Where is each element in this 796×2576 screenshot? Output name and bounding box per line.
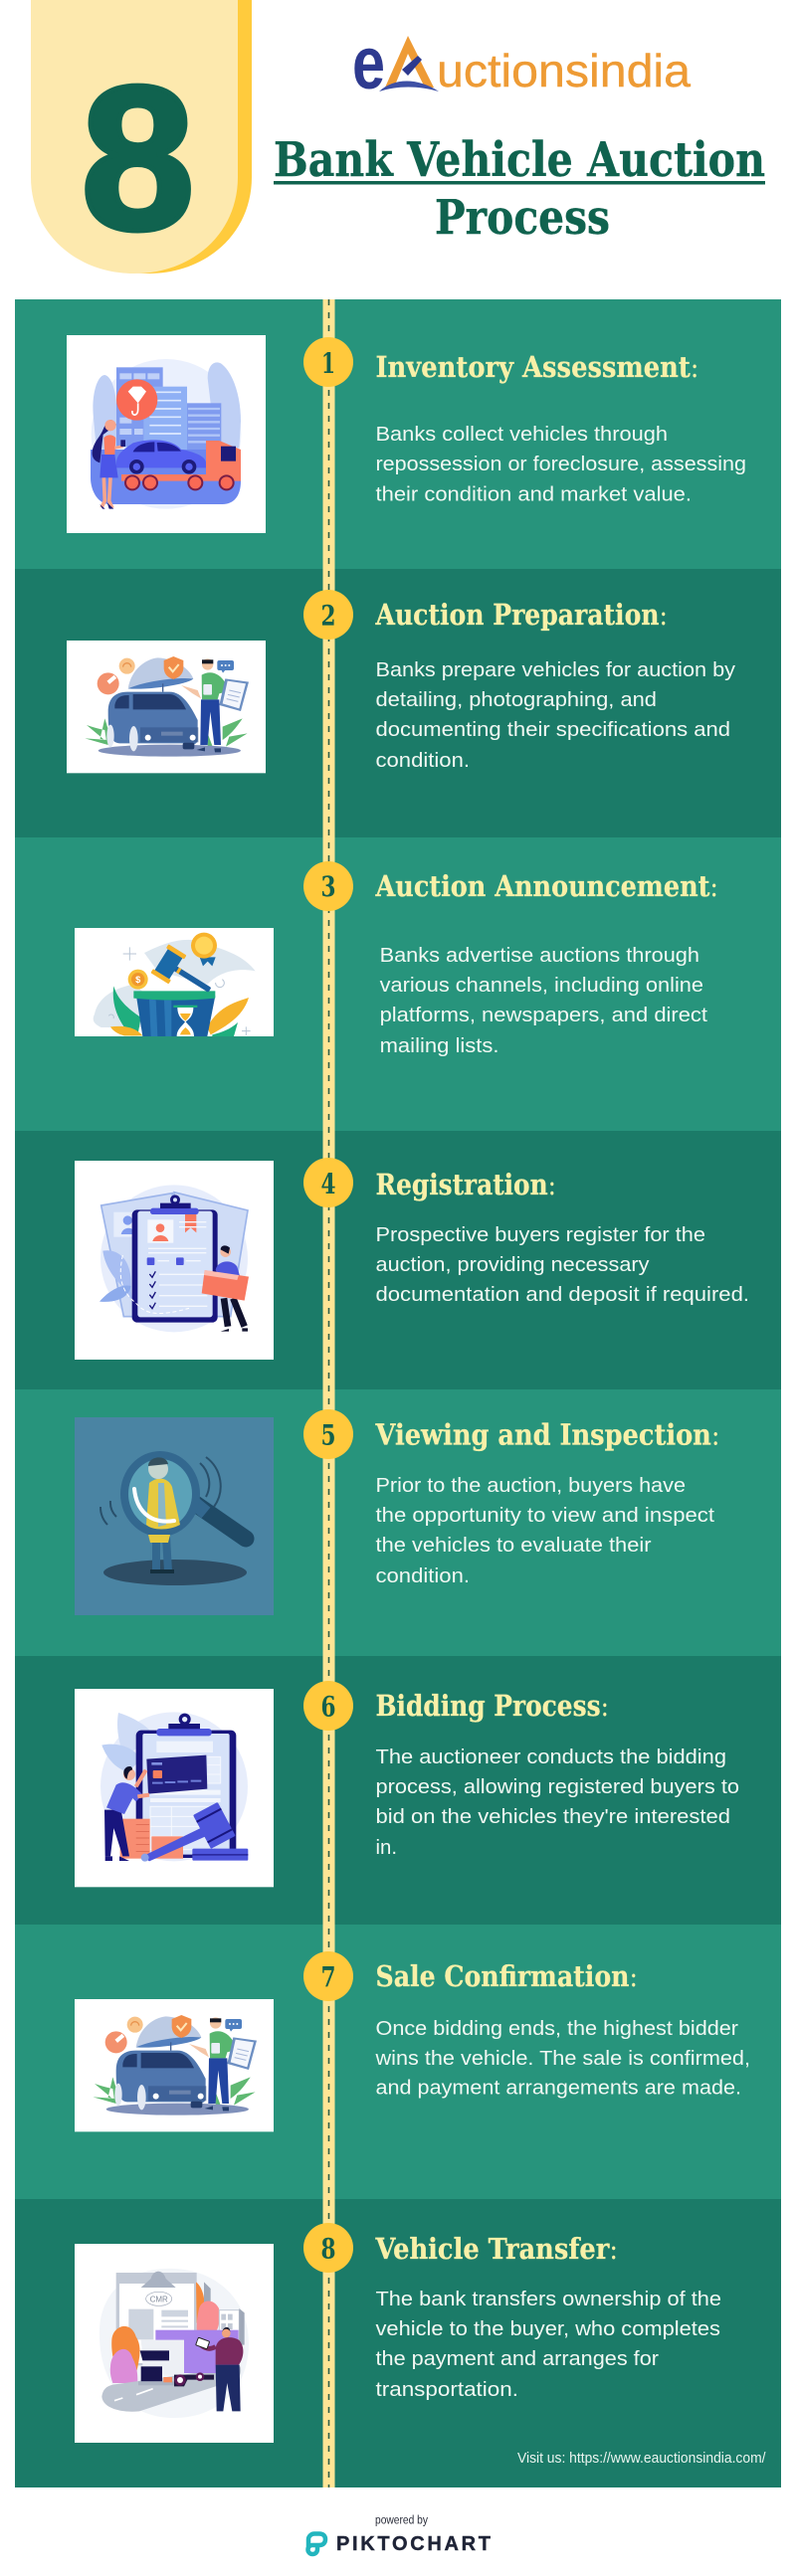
- illustration: registration clipboard: [75, 1161, 274, 1360]
- panel band 1: [15, 299, 781, 569]
- illustration: bidding clipboard and gavel: [75, 1689, 274, 1887]
- illustration: magnifying glass inspector: [75, 1417, 274, 1615]
- body 3: platforms, newspapers, and direct: [380, 1004, 707, 1026]
- footer: powered by Piktochart: powered by: [375, 2514, 428, 2526]
- body 4: documentation and deposit if required.: [376, 1283, 749, 1306]
- header badge with number 8: [31, 0, 252, 274]
- badge number 5: 5: [320, 1418, 336, 1452]
- body 8: [376, 2288, 721, 2401]
- body 5: the opportunity to view and inspect: [376, 1504, 714, 1527]
- illustration: CMR document and truck: CMR: [150, 2295, 168, 2303]
- body 6: [376, 1746, 739, 1859]
- badge number 2: 2: [320, 599, 336, 633]
- step 8: [75, 2223, 721, 2443]
- badge number 7: [303, 1951, 353, 2001]
- panel band 8: [15, 2199, 781, 2487]
- body 7: and payment arrangements are made.: [376, 2077, 741, 2099]
- badge number 1: 1: [321, 347, 335, 380]
- body 1: [376, 423, 746, 505]
- body 3: [380, 944, 707, 1057]
- panel band 6: [15, 1656, 781, 1925]
- body 3: mailing lists.: [380, 1034, 499, 1057]
- header badge with number 8: 8: [81, 44, 195, 273]
- illustration: CMR document and truck: [75, 2244, 274, 2443]
- heading 1: Inventory Assessment:: [376, 350, 698, 384]
- body 7: Once bidding ends, the highest bidder: [376, 2017, 738, 2040]
- badge number 8: [303, 2223, 353, 2273]
- title: [274, 132, 765, 246]
- badge number 1: [303, 337, 353, 387]
- heading 6: Bidding Process:: [376, 1689, 609, 1723]
- badge number 4: 4: [320, 1168, 336, 1200]
- body 2: documenting their specifications and: [376, 718, 730, 741]
- body 3: various channels, including online: [380, 974, 703, 997]
- body 2: condition.: [376, 749, 470, 772]
- illustration: gavel and hourglass: $: [135, 975, 141, 985]
- body 2: detailing, photographing, and: [376, 688, 657, 711]
- body 6: The auctioneer conducts the bidding: [376, 1746, 726, 1768]
- panel band 5: [15, 1389, 781, 1656]
- footer: powered by Piktochart: PIKTOCHART: [336, 2533, 491, 2555]
- illustration: car under umbrella: [75, 1999, 274, 2131]
- timeline dashed line: [322, 299, 334, 2487]
- badge number 6: [303, 1681, 353, 1731]
- step 4: [75, 1158, 749, 1360]
- body 1: repossession or foreclosure, assessing: [376, 453, 746, 475]
- body 2: Banks prepare vehicles for auction by: [376, 658, 736, 681]
- logo: eAuctionsindia: uctionsindia: [437, 45, 691, 96]
- heading 3: Auction Announcement:: [375, 869, 718, 903]
- body 4: Prospective buyers register for the: [376, 1223, 705, 1246]
- badge number 3: [303, 861, 353, 911]
- website note: Visit us: https://www.eauctionsindia.com/: [517, 2450, 766, 2467]
- heading 2: Auction Preparation:: [375, 598, 668, 632]
- body 2: [376, 658, 736, 772]
- body 6: in.: [376, 1836, 397, 1859]
- panel band 2: [15, 569, 781, 837]
- heading 5: Viewing and Inspection:: [375, 1418, 720, 1452]
- panel band 4: [15, 1131, 781, 1389]
- title: Process: [435, 190, 610, 246]
- step 2: [67, 590, 736, 773]
- body 1: Banks collect vehicles through: [376, 423, 668, 446]
- panel band 7: [15, 1925, 781, 2199]
- illustration: gavel and hourglass: [75, 928, 274, 1036]
- step 3: [75, 861, 718, 1057]
- body 6: process, allowing registered buyers to: [376, 1775, 739, 1798]
- badge number 3: 3: [320, 870, 336, 903]
- body 4: auction, providing necessary: [376, 1253, 650, 1276]
- body 4: [376, 1223, 749, 1306]
- logo: eAuctionsindia: e: [352, 22, 385, 104]
- body 8: the payment and arranges for: [376, 2347, 659, 2370]
- step 1: [67, 335, 746, 533]
- badge number 5: [303, 1409, 353, 1459]
- body 8: transportation.: [376, 2378, 518, 2401]
- heading 7: Sale Confirmation:: [376, 1959, 638, 1993]
- step 6: [75, 1681, 739, 1887]
- body 5: [376, 1474, 714, 1587]
- body 5: Prior to the auction, buyers have: [376, 1474, 686, 1497]
- heading 8: Vehicle Transfer:: [375, 2232, 618, 2266]
- body 1: their condition and market value.: [376, 483, 692, 505]
- badge number 2: [303, 590, 353, 640]
- step 7: [75, 1951, 750, 2131]
- body 7: wins the vehicle. The sale is confirmed,: [374, 2047, 750, 2070]
- body 3: Banks advertise auctions through: [380, 944, 699, 967]
- panel band 3: [15, 837, 781, 1131]
- badge number 8: 8: [320, 2232, 336, 2266]
- body 5: the vehicles to evaluate their: [376, 1534, 652, 1557]
- body 5: condition.: [376, 1564, 470, 1587]
- body 8: vehicle to the buyer, who completes: [376, 2317, 720, 2340]
- body 8: The bank transfers ownership of the: [376, 2288, 721, 2310]
- footer: powered by Piktochart: [308, 2514, 491, 2555]
- badge number 6: 6: [320, 1691, 336, 1723]
- illustration: tow truck: [67, 335, 266, 533]
- logo: eAuctionsindia: [352, 22, 691, 104]
- illustration: car under umbrella: [67, 641, 266, 773]
- heading 4: Registration:: [376, 1168, 556, 1201]
- step 5: [75, 1409, 720, 1615]
- body 6: bid on the vehicles they're interested: [376, 1805, 730, 1828]
- badge number 4: [303, 1158, 353, 1207]
- body 7: [374, 2017, 750, 2099]
- badge number 7: 7: [320, 1961, 336, 1993]
